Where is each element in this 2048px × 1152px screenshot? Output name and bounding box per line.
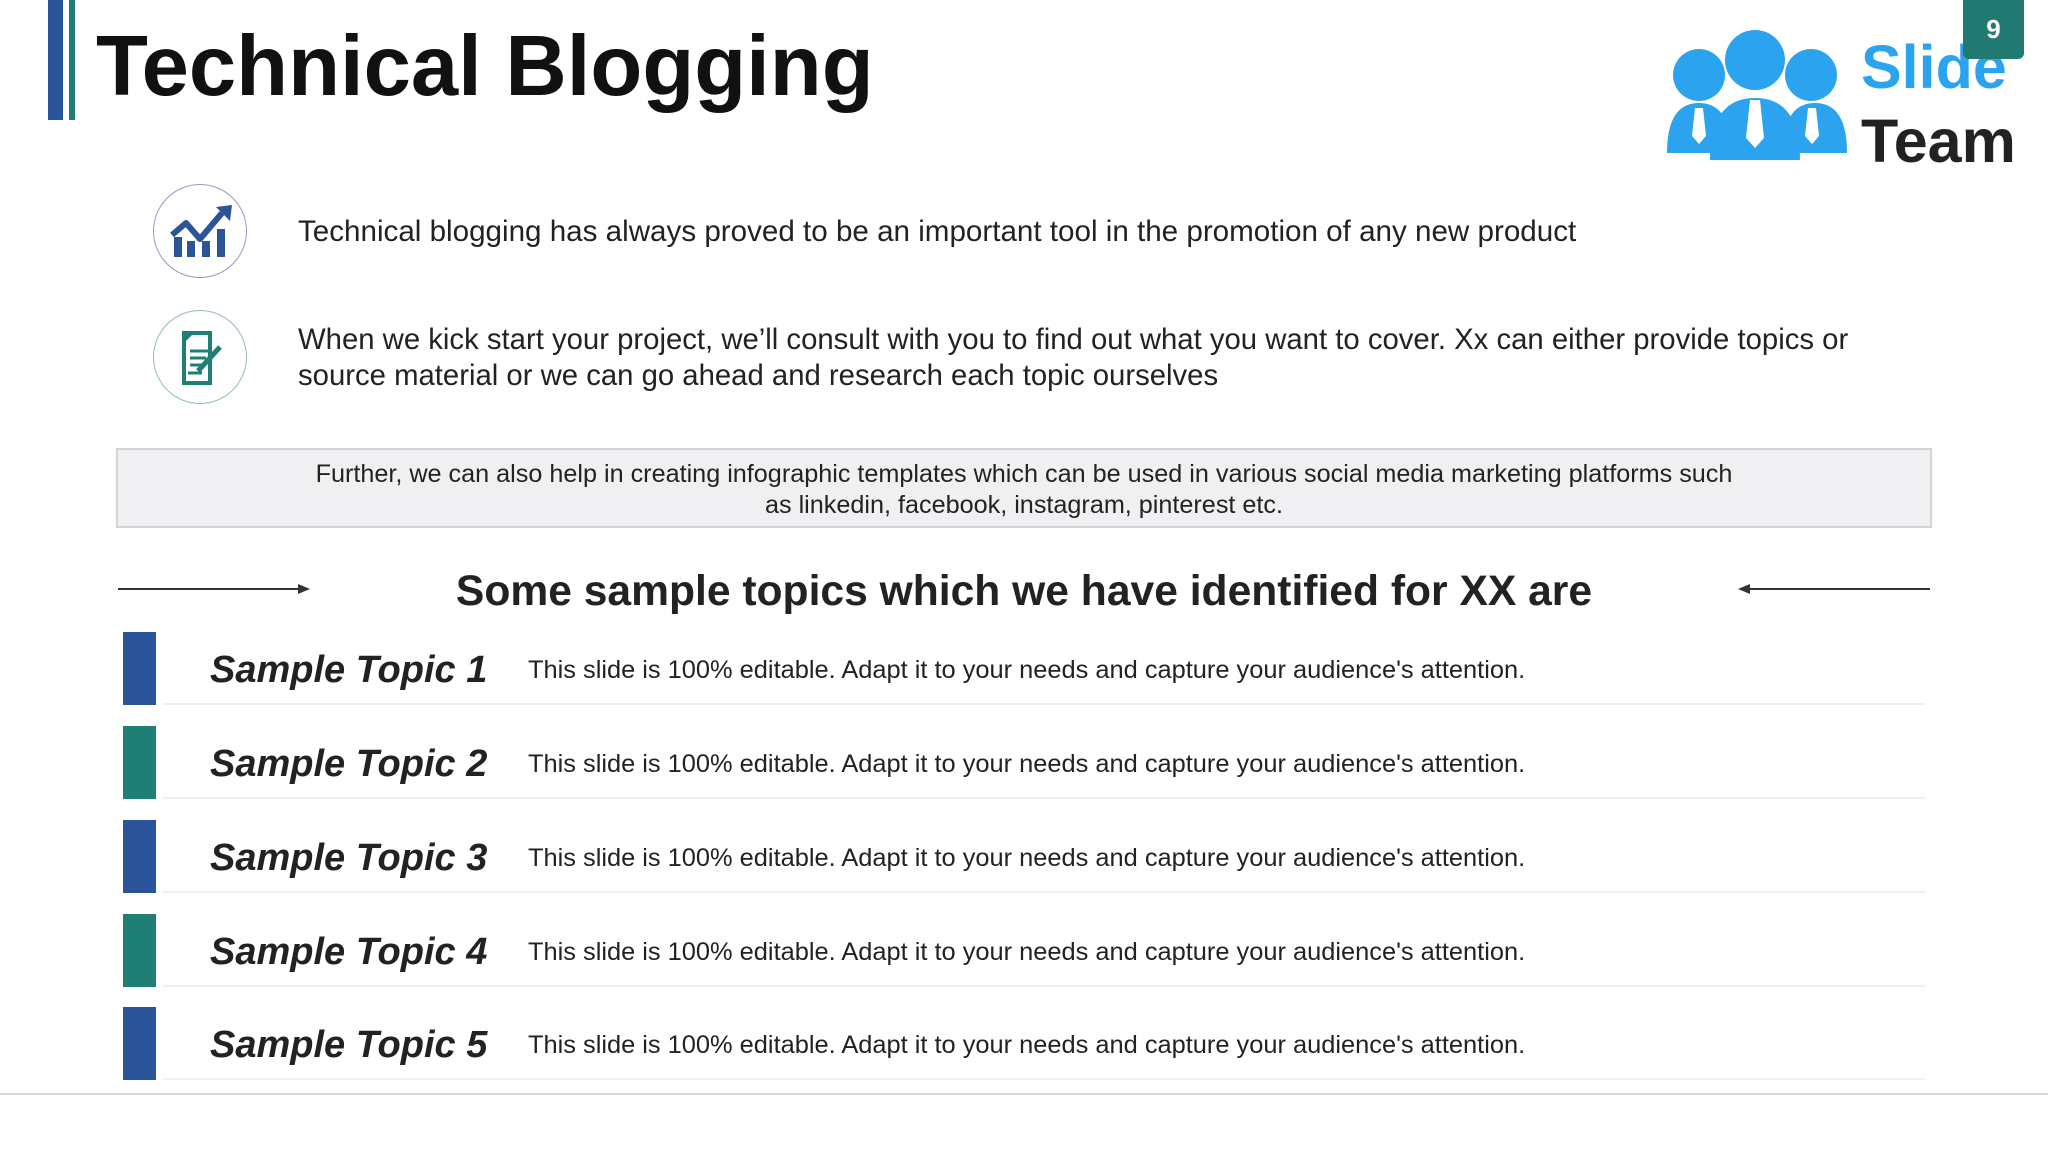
topic row 3: This slide is 100% editable. Adapt it to your needs and capture your audience's attention.	[528, 844, 1525, 872]
topic row 1: Sample Topic 1	[210, 649, 487, 691]
topic row 2: Sample Topic 2	[210, 743, 487, 785]
logo: SlideTeam	[1667, 30, 2016, 175]
topic row 3	[123, 820, 1925, 893]
arrow: right	[1738, 584, 1930, 594]
topic row 4	[123, 914, 1925, 987]
arrow: left	[118, 584, 310, 594]
topic row 5	[123, 1007, 1925, 1080]
callout box: Further, we can also help in creating infographic templates which can be used in various social media marketing platforms such	[316, 460, 1732, 488]
topic row 4: This slide is 100% editable. Adapt it to your needs and capture your audience's attention.	[528, 938, 1525, 966]
topic row 3: Sample Topic 3	[210, 837, 487, 879]
topic row 1	[123, 632, 1925, 705]
icon: document with pen	[153, 310, 247, 404]
text: intro point 1: Technical blogging has always proved to be an important tool in the promotion of any new product	[298, 215, 1576, 248]
callout box	[116, 448, 1932, 528]
logo: SlideTeam: Team	[1861, 107, 2016, 175]
logo: SlideTeam: Slide	[1861, 33, 2007, 101]
icon: growth chart	[153, 184, 247, 278]
topic row 5: Sample Topic 5	[210, 1024, 487, 1066]
title: Technical Blogging	[96, 19, 874, 114]
topic row 2: This slide is 100% editable. Adapt it to your needs and capture your audience's attention.	[528, 750, 1525, 778]
topic row 2	[123, 726, 1925, 799]
callout box: as linkedin, facebook, instagram, pinterest etc.	[765, 491, 1283, 519]
page number badge: 9	[1986, 14, 2001, 44]
title accent bars	[48, 0, 75, 120]
text: intro point 2	[298, 323, 1848, 392]
page number badge	[1963, 0, 2024, 59]
topic row 1: This slide is 100% editable. Adapt it to your needs and capture your audience's attention.	[528, 656, 1525, 684]
section heading: Some sample topics which we have identified for XX are	[456, 567, 1592, 615]
topic row 5: This slide is 100% editable. Adapt it to your needs and capture your audience's attention.	[528, 1031, 1525, 1059]
topic row 4: Sample Topic 4	[210, 931, 487, 973]
text: intro point 2: source material or we can go ahead and research each topic ourselves	[298, 359, 1218, 392]
text: intro point 2: When we kick start your project, we’ll consult with you to find out what you want to cover. Xx can either provide topics or	[298, 323, 1848, 356]
